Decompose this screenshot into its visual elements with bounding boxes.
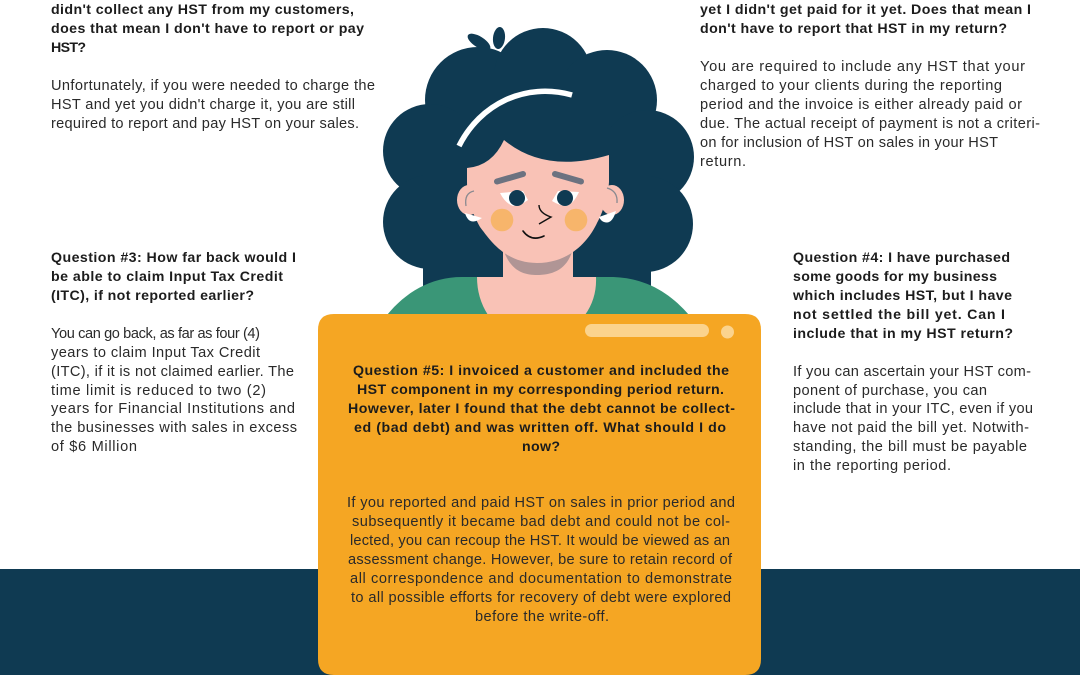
text: question 4: include that in your ITC, even if you — [793, 401, 1033, 417]
text: question 4: include that in my HST return? — [793, 326, 1013, 342]
text: question 4: in the reporting period. — [793, 458, 951, 474]
text: question 3: years for Financial Institutions and — [51, 401, 295, 417]
question 5 answer: subsequently it became bad debt and could not be col- — [352, 514, 730, 530]
shoulders — [387, 277, 689, 315]
panel: question 5 card — [318, 314, 761, 675]
text: question 1: Unfortunately, if you were needed to charge the — [51, 78, 375, 94]
question 5 answer: to all possible efforts for recovery of debt were explored — [351, 590, 731, 606]
bottom navy band — [0, 569, 1080, 675]
mouth — [523, 231, 544, 238]
text: question 2: due. The actual receipt of payment is not a criteri- — [700, 116, 1040, 132]
face — [467, 140, 609, 263]
question 5 heading — [348, 363, 735, 455]
ear lines — [466, 188, 617, 206]
text: question 4: not settled the bill yet. Can I — [793, 307, 1005, 323]
text: question 2: You are required to include any HST that your — [700, 59, 1025, 75]
question 5 heading: However, later I found that the debt cannot be collect- — [348, 401, 735, 417]
question 5 heading: HST component in my corresponding period return. — [357, 382, 724, 398]
card background — [318, 314, 761, 675]
text: question 4: some goods for my business — [793, 269, 997, 285]
text: question 3: (ITC), if not reported earlier? — [51, 288, 254, 304]
text: question 1: HST? — [51, 40, 86, 56]
text: question 4: ponent of purchase, you can — [793, 383, 987, 399]
text: question 4: Question #4: I have purchased — [793, 250, 1010, 266]
question 5 answer: assessment change. However, be sure to retain record of — [348, 552, 733, 568]
hair — [383, 26, 694, 290]
text: question 1: does that mean I don't have to report or pay — [51, 21, 364, 37]
text: question 1 — [51, 2, 375, 132]
nose — [539, 205, 551, 224]
neck and chest — [477, 245, 596, 315]
text: question 3: Question #3: How far back would I — [51, 250, 296, 266]
text: question 3: (ITC), if it is not claimed earlier. The — [51, 364, 294, 380]
text: question 3: be able to claim Input Tax Credit — [51, 269, 283, 285]
text: question 1: didn't collect any HST from my customers, — [51, 2, 354, 18]
earrings — [465, 211, 616, 223]
text: question 2: return. — [700, 154, 746, 170]
text: question 4: If you can ascertain your HST com- — [793, 364, 1031, 380]
text: question 2: on for inclusion of HST on sales in your HST — [700, 135, 998, 151]
card dot decoration — [721, 326, 734, 338]
text: question 2: charged to your clients during the reporting — [700, 78, 1002, 94]
question 5 heading: now? — [522, 439, 560, 455]
question 5 answer — [347, 495, 735, 625]
eyes — [500, 190, 579, 206]
eyebrows — [497, 174, 581, 182]
text: question 3: of $6 Million — [51, 439, 137, 455]
text: question 1: HST and yet you didn't charge it, you are still — [51, 97, 355, 113]
text: question 3: the businesses with sales in excess — [51, 420, 297, 436]
card pill decoration — [585, 324, 709, 337]
question 5 answer: If you reported and paid HST on sales in prior period and — [347, 495, 735, 511]
neck shadow — [503, 248, 573, 275]
text: question 4: have not paid the bill yet. Notwith- — [793, 420, 1029, 436]
text: question 4: standing, the bill must be payable — [793, 439, 1027, 455]
text: question 2: period and the invoice is either already paid or — [700, 97, 1022, 113]
question 5 heading: ed (bad debt) and was written off. What should I do — [354, 420, 726, 436]
text: question 2 — [700, 2, 1040, 170]
question 5 answer: lected, you can recoup the HST. It would be viewed as an — [350, 533, 730, 549]
text: question 4 — [792, 250, 1033, 474]
ears — [457, 185, 624, 215]
cheeks — [491, 209, 587, 231]
illustration: woman — [383, 26, 694, 315]
text: question 3: You can go back, as far as four (4) — [51, 326, 260, 342]
question 5 heading: Question #5: I invoiced a customer and included the — [353, 363, 729, 379]
text: question 2: don't have to report that HST in my return? — [700, 21, 1007, 37]
question 5 answer: before the write-off. — [475, 609, 609, 625]
text: question 3: time limit is reduced to two (2) — [51, 383, 266, 399]
hair band — [459, 91, 572, 146]
text: question 3 — [51, 250, 297, 455]
text: question 1: required to report and pay HST on your sales. — [51, 116, 359, 132]
question 5 answer: all correspondence and documentation to demonstrate — [350, 571, 732, 587]
text: question 3: years to claim Input Tax Credit — [51, 345, 260, 361]
text: question 2: yet I didn't get paid for it yet. Does that mean I — [700, 2, 1031, 18]
text: question 4: which includes HST, but I have — [792, 288, 1012, 304]
